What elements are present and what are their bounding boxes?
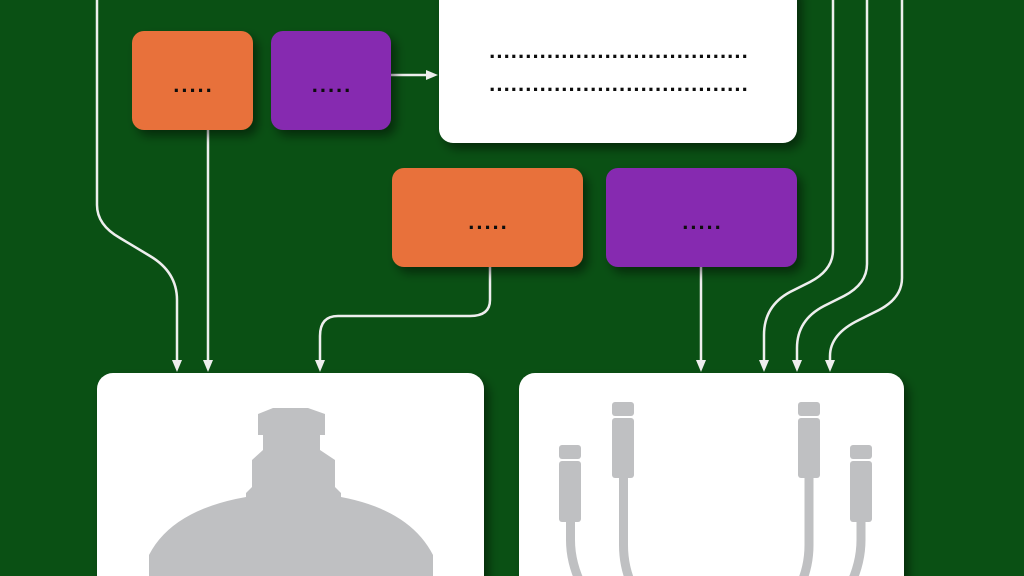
panel: cables [519, 373, 904, 576]
arrowheads [172, 70, 835, 372]
icon: cables [559, 402, 872, 576]
box: purple small [271, 31, 391, 130]
box: purple wide [606, 168, 797, 267]
connector lines [97, 0, 902, 362]
box: orange small: ..... [173, 72, 214, 97]
box: purple small: ..... [312, 72, 352, 97]
box: white text panel: .................................... [489, 71, 749, 96]
box: orange wide: ..... [468, 209, 509, 234]
icon: bottle [149, 408, 433, 576]
box: white text panel: .................................... [489, 38, 749, 63]
box: orange wide [392, 168, 583, 267]
panel: bottle [97, 373, 484, 576]
box: white text panel [439, 0, 797, 143]
box: orange small [132, 31, 253, 130]
box: purple wide: ..... [682, 209, 723, 234]
